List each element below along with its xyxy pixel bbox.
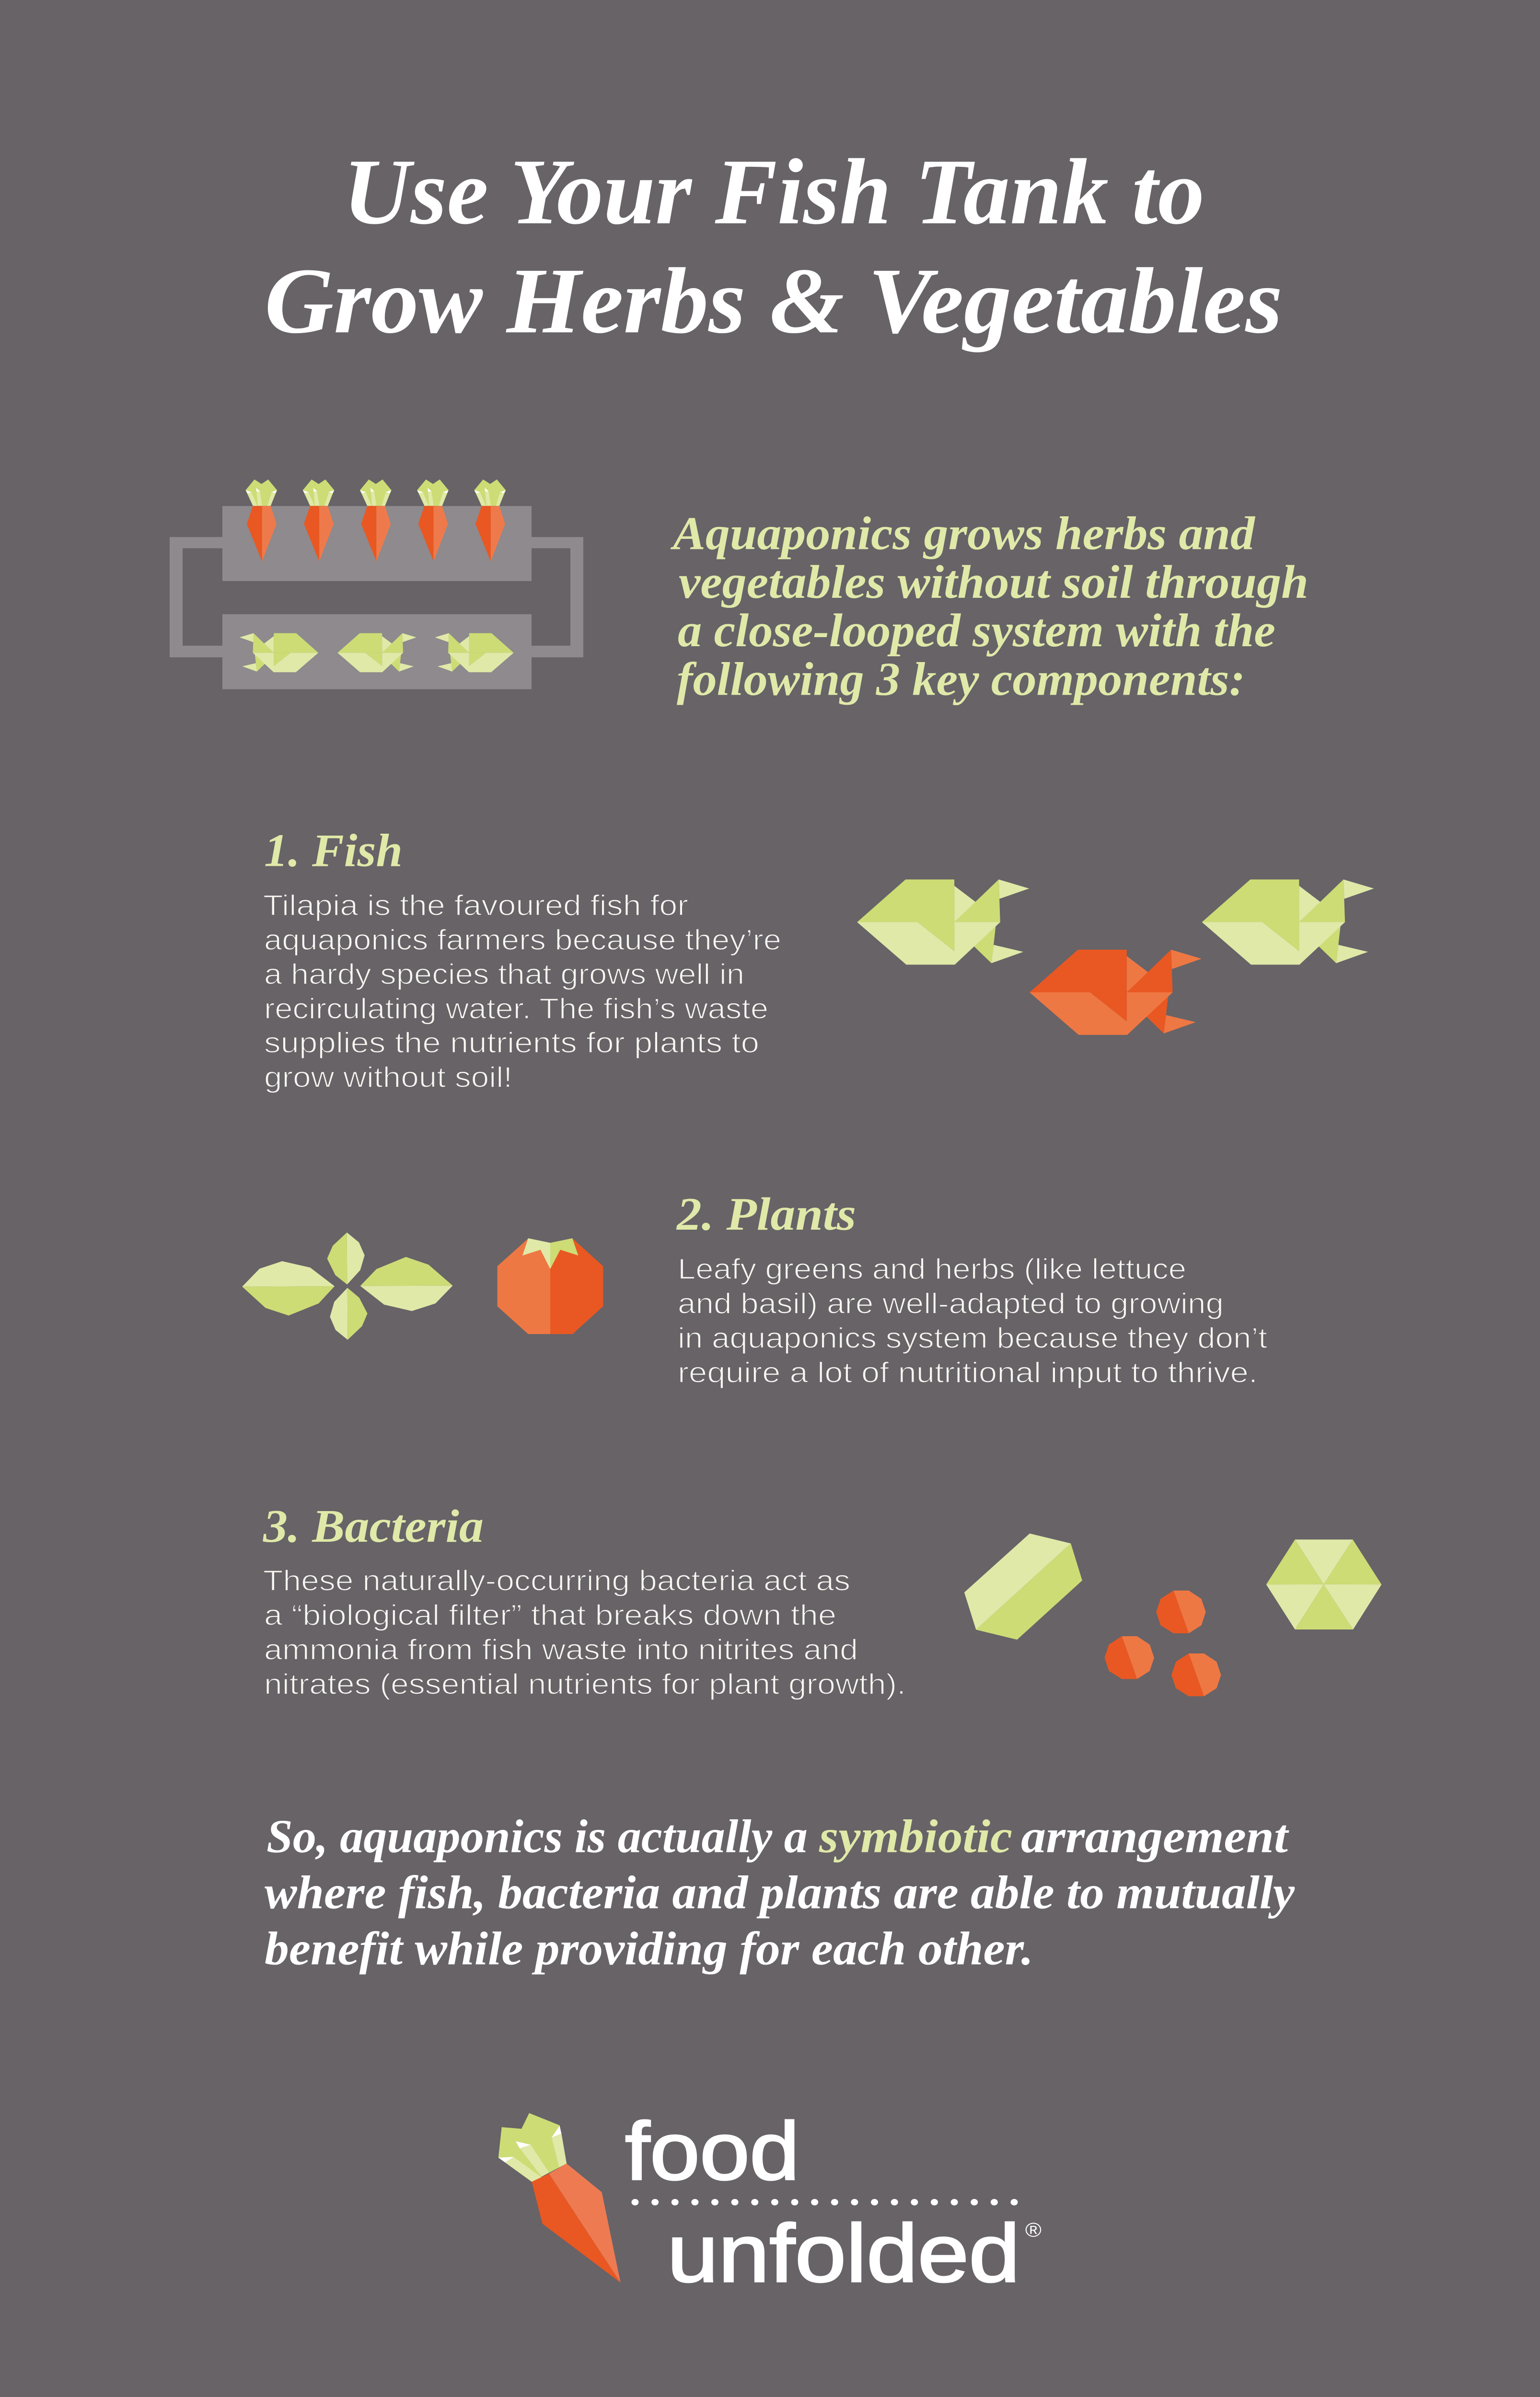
text: fish: [263, 889, 781, 1094]
icon: bacteria shapes: [964, 1534, 1381, 1696]
text: fish: aquaponics farmers because they’re: [264, 923, 781, 956]
small fish: [240, 633, 514, 672]
text: fish: a hardy species that grows well in: [264, 958, 744, 990]
text: fish: supplies the nutrients for plants to: [264, 1026, 759, 1059]
conclusion text: So, aquaponics is actually a: [266, 1810, 808, 1862]
loop pipe: [170, 537, 583, 657]
conclusion text: where fish, bacteria and plants are able to mutually: [265, 1866, 1295, 1919]
heading: 1. Fish: 1. Fish: [264, 825, 403, 876]
registered mark: ®: [1025, 2219, 1042, 2241]
title: [265, 140, 1283, 353]
hexagonal bacterium: [1266, 1539, 1381, 1629]
plant tank: [222, 506, 532, 581]
carrots: [245, 479, 506, 561]
text: plants: and basil) are well-adapted to growing: [678, 1287, 1224, 1320]
diagram: closed-loop aquaponics tanks: [170, 479, 583, 689]
text: bacteria: ammonia from fish waste into nitrites and: [264, 1633, 858, 1666]
text: bacteria: These naturally-occurring bacteria act as: [263, 1564, 850, 1597]
text: bacteria: [263, 1564, 906, 1700]
text: plants: Leafy greens and herbs (like lettuce: [678, 1253, 1186, 1285]
text: plants: in aquaponics system because they don’t: [678, 1322, 1267, 1354]
dotted divider: [635, 2199, 1015, 2206]
intro text: Aquaponics grows herbs and: [670, 507, 1256, 559]
rod bacterium: [964, 1534, 1082, 1640]
conclusion text: [265, 1810, 1295, 1975]
text: fish: recirculating water. The fish’s waste: [264, 992, 768, 1025]
conclusion text: arrangement: [1021, 1810, 1289, 1862]
cocci: [1104, 1591, 1221, 1696]
text: plants: require a lot of nutritional input to thrive.: [678, 1356, 1258, 1389]
logo carrot: [498, 2113, 621, 2282]
intro text: following 3 key components:: [677, 652, 1245, 705]
text: bacteria: a “biological filter” that breaks down the: [264, 1599, 836, 1631]
text: plants: [678, 1253, 1267, 1389]
intro text: [670, 507, 1308, 705]
heading: 2. Plants: 2. Plants: [676, 1188, 856, 1240]
intro text: vegetables without soil through: [679, 556, 1308, 608]
text: fish: Tilapia is the favoured fish for: [263, 889, 688, 921]
title: Grow Herbs & Vegetables: [265, 248, 1283, 353]
text: fish: grow without soil!: [264, 1061, 512, 1094]
conclusion text: benefit while providing for each other.: [265, 1922, 1033, 1975]
wordmark: unfolded: unfolded: [667, 2208, 1020, 2299]
wordmark: food: food: [625, 2106, 799, 2197]
intro text: a close-looped system with the: [678, 604, 1275, 657]
title: Use Your Fish Tank to: [343, 140, 1204, 244]
logo: food unfolded: [498, 2106, 1042, 2299]
conclusion text: symbiotic: [819, 1810, 1012, 1862]
icon: three fish: [857, 879, 1374, 1035]
heading: 3. Bacteria: 3. Bacteria: [263, 1501, 484, 1552]
fish tank: [222, 614, 532, 689]
icon: basil leaves: [242, 1233, 452, 1340]
text: bacteria: nitrates (essential nutrients for plant growth).: [264, 1668, 906, 1700]
icon: tomato: [498, 1238, 603, 1334]
